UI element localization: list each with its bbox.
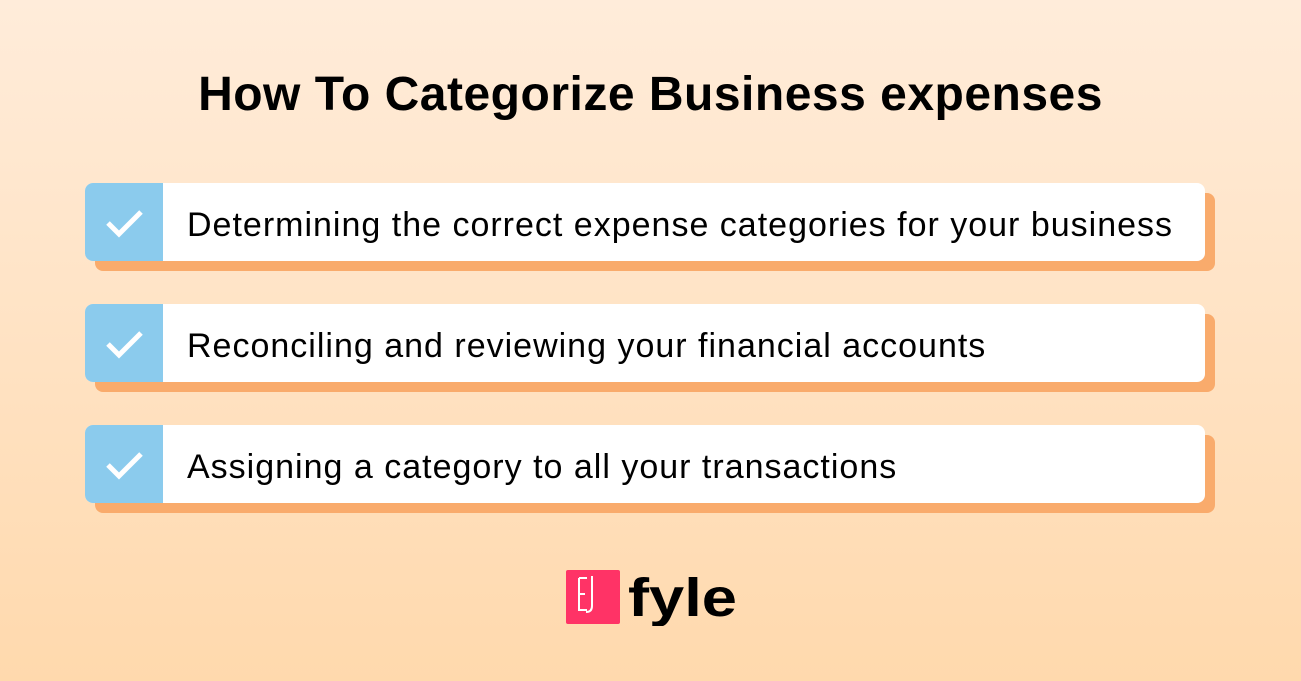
text 1: Determining the correct expense categories for your business: [187, 206, 1173, 244]
icon: check 3: [85, 425, 163, 503]
title: How To Categorize Business expenses: [198, 68, 1103, 121]
icon: check 1: [85, 183, 163, 261]
item 1: [85, 183, 1215, 271]
item 2: [85, 304, 1215, 392]
item 3: [85, 425, 1215, 513]
text 3: Assigning a category to all your transactions: [187, 448, 897, 486]
logo: fyle: [566, 570, 737, 626]
icon: check 2: [85, 304, 163, 382]
text 2: Reconciling and reviewing your financial accounts: [187, 327, 986, 365]
